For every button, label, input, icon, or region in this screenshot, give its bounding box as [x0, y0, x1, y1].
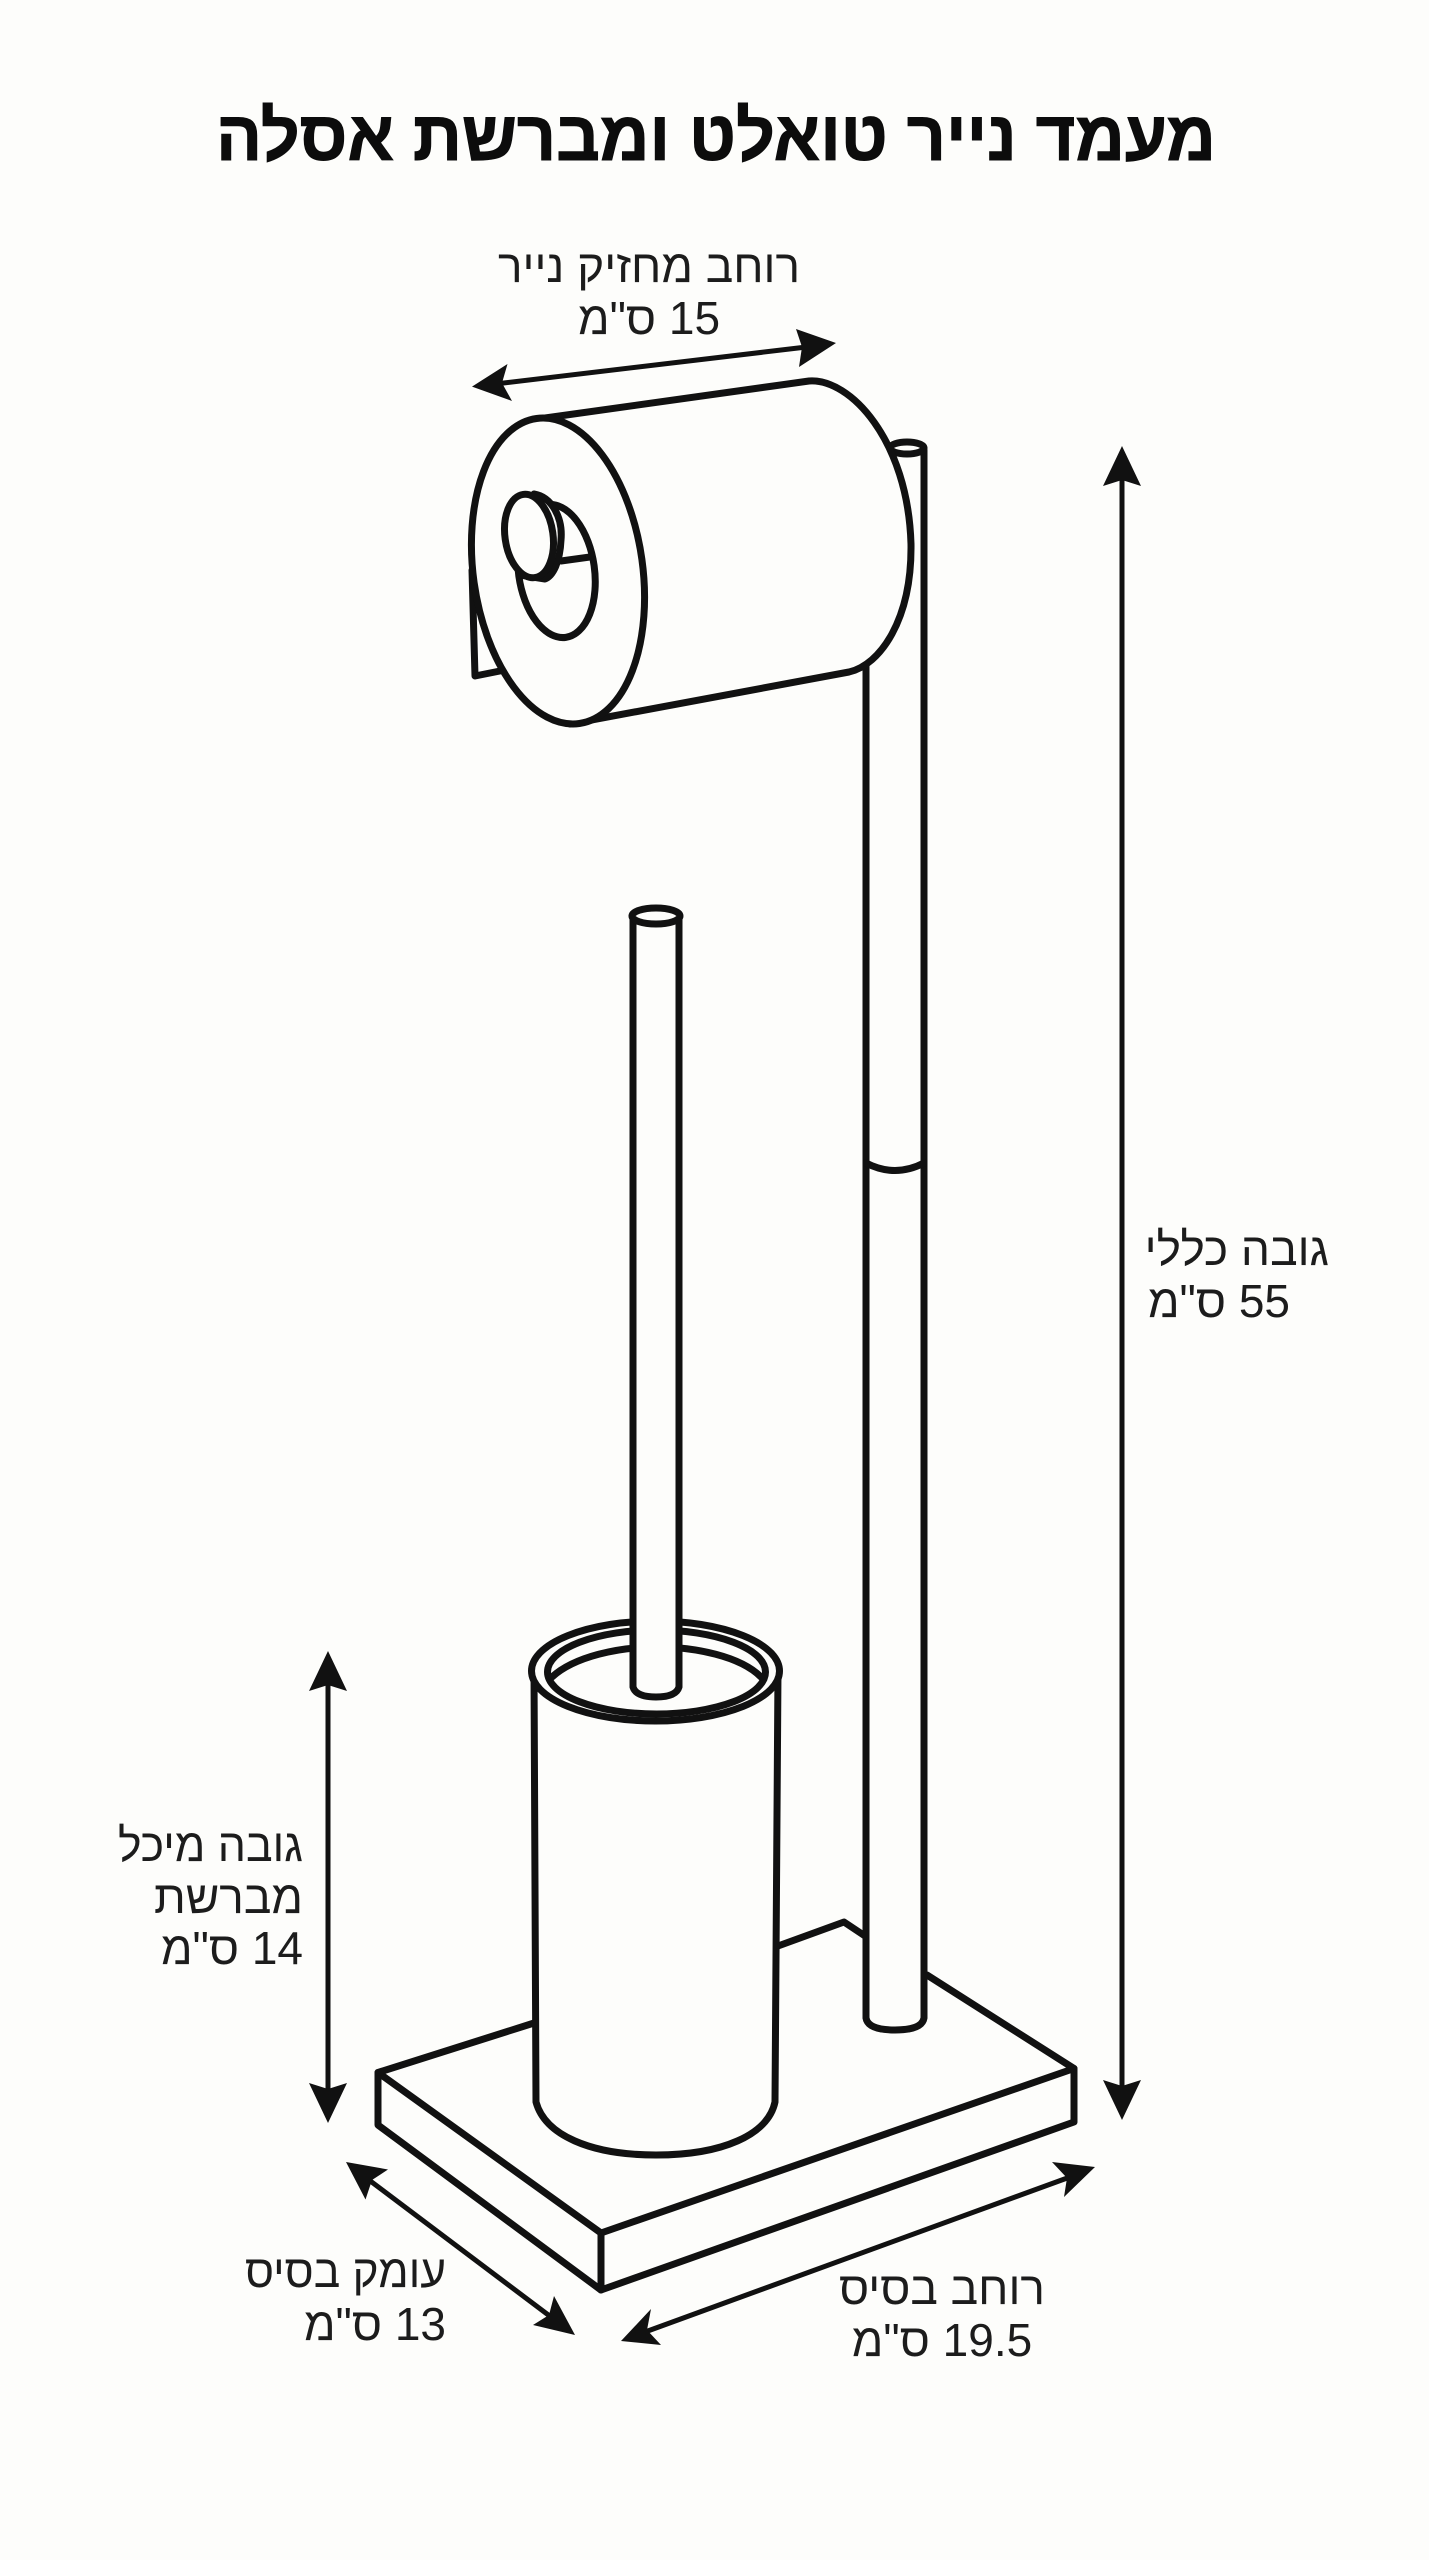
spindle knob: [499, 491, 590, 581]
base plate: [378, 1922, 1074, 2290]
label: canister height: מברשת: [154, 1871, 303, 1923]
label: canister height: [118, 1819, 303, 1974]
label: paper holder width: 15 ס"מ: [578, 292, 720, 344]
paper roll body: [545, 381, 911, 724]
toilet paper roll holder: [453, 381, 911, 735]
label: overall height: 55 ס"מ: [1148, 1275, 1290, 1327]
arrow: overall height: [1103, 446, 1141, 2120]
title: מעמד נייר טואלט ומברשת אסלה: [216, 97, 1216, 175]
roll core hole: [510, 499, 603, 643]
arrow: base depth: [346, 2162, 575, 2335]
label: base depth: 13 ס"מ: [304, 2298, 446, 2350]
pole: [866, 442, 924, 2030]
label: canister height: 14 ס"מ: [161, 1922, 303, 1974]
label: base depth: עומק בסיס: [245, 2245, 446, 2297]
label: paper holder width: [498, 240, 800, 344]
arrow: canister height: [309, 1651, 347, 2123]
arrow: paper holder width: [472, 329, 836, 401]
label: canister height: גובה מיכל: [118, 1819, 303, 1871]
label: base width: רוחב בסיס: [839, 2262, 1045, 2314]
label: overall height: גובה כללי: [1145, 1223, 1329, 1275]
brush canister: [532, 908, 780, 2155]
label: base depth: [245, 2245, 446, 2350]
roll front face: [453, 407, 663, 735]
brush handle: [633, 916, 679, 1697]
label: base width: 19.5 ס"מ: [852, 2314, 1032, 2366]
label: overall height: [1145, 1223, 1329, 1327]
paper flap: [472, 570, 500, 676]
label: base width: [839, 2262, 1045, 2366]
arrow: base width: [621, 2162, 1095, 2345]
label: paper holder width: רוחב מחזיק נייר: [498, 240, 800, 292]
